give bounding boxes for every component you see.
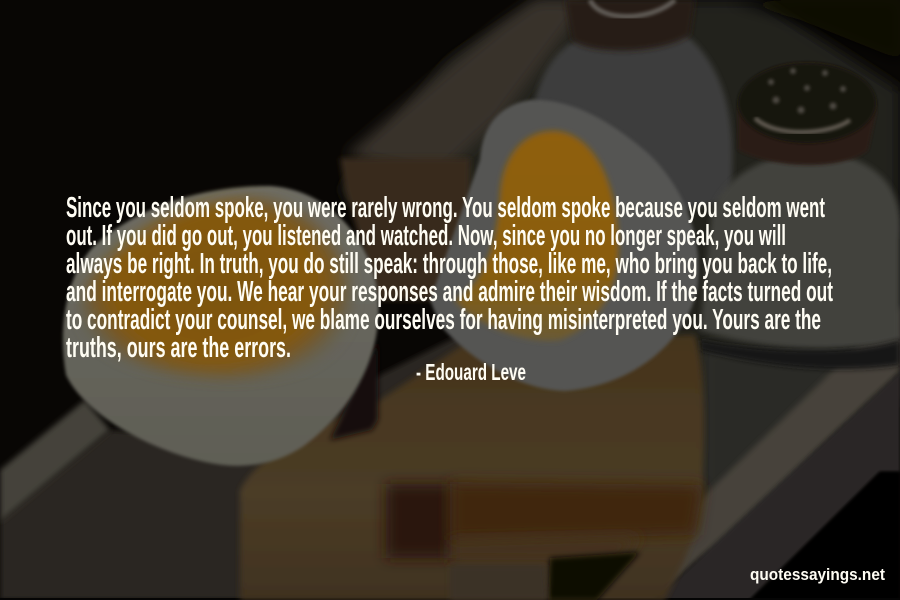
quote text: truths, ours are the errors. (66, 332, 291, 364)
salt shaker: rear (529, 0, 733, 230)
watermark: quotessayings.net (750, 565, 885, 584)
toast (240, 335, 704, 600)
pepper shaker: right (700, 63, 900, 369)
attribution: - Edouard Leve (416, 359, 526, 385)
quote text (66, 192, 833, 364)
egg: right half (430, 100, 699, 391)
egg: left half (63, 186, 379, 466)
